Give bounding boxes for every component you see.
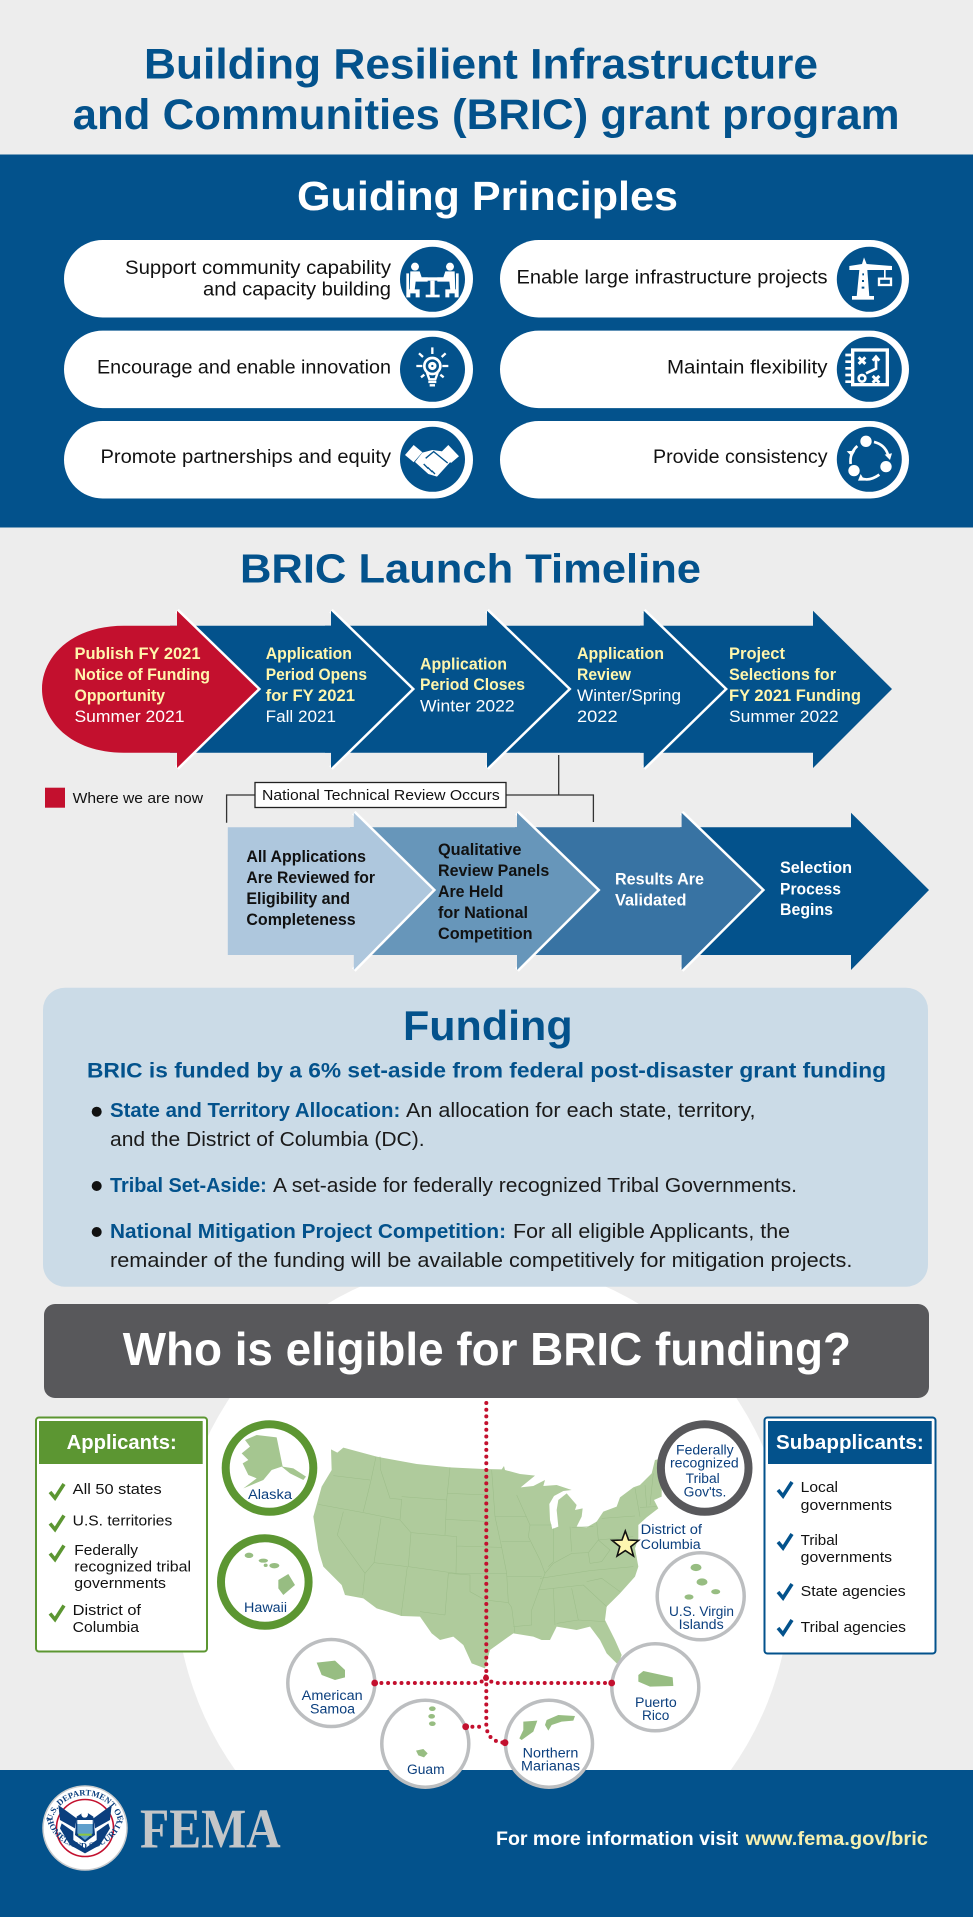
arrow: qualitative review panels: for National	[438, 904, 528, 922]
arrow: application period closes: Winter 2022	[420, 698, 515, 716]
arrow: results are validated: Results Are	[615, 871, 704, 889]
circle: Northern Marianas: Northern	[523, 1745, 578, 1760]
footer: more information link: www.fema.gov/bric	[745, 1829, 928, 1850]
arrow: qualitative review panels: Are Held	[438, 883, 503, 901]
icon: cycle arrows	[847, 436, 892, 481]
legend: where we are now	[45, 788, 203, 808]
circle: Puerto Rico: Rico	[642, 1708, 669, 1723]
bullet: national mitigation project competition: For all eligible Applicants, the	[513, 1220, 790, 1243]
bullet: national mitigation project competition	[92, 1220, 852, 1272]
circle: U.S. Virgin Islands: Islands	[679, 1617, 724, 1632]
circle: Puerto Rico	[612, 1644, 699, 1731]
arrow: publish notice (current stage): Summer 2021	[74, 708, 184, 726]
route: dotted lines to territories	[375, 1403, 612, 1743]
panel: subapplicants	[764, 1418, 936, 1654]
arrow: qualitative review panels: Qualitative	[438, 841, 521, 859]
arrow: selection process begins: Begins	[780, 901, 833, 919]
principle: consistency	[500, 421, 909, 498]
bullet: state and territory allocation: An allocation for each state, territory,	[406, 1099, 756, 1122]
checklist: subapplicants: State agencies	[801, 1584, 906, 1600]
circle: federally recognized Tribal governments: recognized	[670, 1456, 739, 1471]
title: Building Resilient Infrastructure	[144, 40, 818, 88]
arrow: application period opens: for FY 2021	[266, 687, 355, 705]
checklist: applicants: All 50 states	[73, 1482, 162, 1498]
connector: national technical review	[227, 755, 593, 823]
checklist: applicants: District of	[73, 1603, 142, 1619]
logo: FEMA wordmark: FEMA	[140, 1799, 281, 1861]
circle: U.S. Virgin Islands	[657, 1553, 744, 1640]
circle: American Samoa: American	[302, 1688, 363, 1703]
bullet: national mitigation project competition: remainder of the funding will be available competitively for mitigation projects.	[110, 1249, 852, 1272]
checklist: subapplicants: Tribal	[801, 1533, 838, 1549]
circle: federally recognized Tribal governments: Tribal	[686, 1471, 720, 1486]
arrow: qualitative review panels	[350, 813, 597, 970]
arrow: all applications reviewed: All Applications	[246, 848, 366, 866]
principle: partnerships: Promote partnerships and equity	[100, 447, 392, 468]
principle: flexibility	[500, 331, 909, 408]
arrow: application review: Application	[577, 645, 664, 663]
principle: large infrastructure: Enable large infrastructure projects	[516, 268, 828, 288]
arrow: qualitative review panels: Review Panels	[438, 862, 549, 880]
arrow: selection process begins: Selection	[780, 859, 852, 877]
arrow: application review	[480, 611, 724, 768]
logo: DHS seal: U.S. DEPARTMENT OF	[46, 1790, 124, 1820]
bullet: tribal set-aside: Tribal Set-Aside:	[110, 1174, 267, 1197]
circle: American Samoa	[288, 1640, 375, 1726]
arrow: project selections: Project	[729, 645, 786, 663]
marker: District of Columbia star: Columbia	[641, 1537, 701, 1552]
principle: community capability: Support community capability	[125, 258, 392, 279]
bullet: state and territory allocation	[92, 1099, 755, 1151]
arrow: application review: 2022	[577, 708, 618, 726]
checklist: subapplicants: Local	[801, 1480, 838, 1496]
bullet: tribal set-aside: A set-aside for federally recognized Tribal Governments.	[273, 1174, 797, 1197]
title	[73, 40, 900, 139]
circle: federally recognized Tribal governments: Federally	[676, 1442, 734, 1457]
checklist: subapplicants: governments	[801, 1550, 892, 1566]
arrow: project selections: FY 2021 Funding	[729, 687, 861, 705]
banner: who is eligible: Who is eligible for BRIC funding?	[123, 1323, 851, 1375]
icon: crane	[849, 257, 892, 300]
circle: Hawaii: Hawaii	[244, 1600, 287, 1615]
checklist: subapplicants: governments	[801, 1498, 892, 1514]
banner: who is eligible	[44, 1304, 929, 1398]
arrow: all applications reviewed: Are Reviewed for	[246, 869, 376, 887]
arrow: application period opens	[170, 611, 412, 768]
icon: people at table	[406, 263, 459, 297]
title: and Communities (BRIC) grant program	[73, 91, 900, 139]
arrow: application period opens: Application	[266, 645, 352, 663]
arrow: publish notice (current stage): Notice of Funding	[74, 666, 210, 684]
circle: U.S. Virgin Islands: U.S. Virgin	[669, 1604, 734, 1619]
arrow: application period closes: Application	[420, 656, 507, 674]
connector: national technical review: National Technical Review Occurs	[262, 787, 500, 804]
panel: subapplicants: Subapplicants:	[776, 1432, 924, 1454]
panel: guiding principles	[0, 154, 973, 528]
arrow: application period opens: Period Opens	[266, 666, 367, 684]
panel: applicants	[36, 1418, 207, 1652]
checklist: subapplicants	[778, 1480, 906, 1636]
principle: innovation	[64, 331, 473, 408]
circle: Alaska: Alaska	[248, 1487, 293, 1502]
footer: more information link	[496, 1829, 928, 1850]
arrow: application period opens: Fall 2021	[266, 708, 336, 726]
principle: large infrastructure	[500, 240, 909, 318]
principle: flexibility: Maintain flexibility	[667, 358, 828, 379]
checklist: applicants: governments	[74, 1576, 166, 1592]
principle: consistency: Provide consistency	[653, 447, 828, 468]
arrow: publish notice (current stage)	[42, 611, 258, 768]
circle: federally recognized Tribal governments	[661, 1424, 748, 1512]
checklist: applicants: Federally	[74, 1543, 139, 1559]
circle: Guam: Guam	[407, 1762, 445, 1777]
logo: DHS seal	[42, 1785, 128, 1871]
checklist: subapplicants: Tribal agencies	[801, 1620, 906, 1636]
footer: more information link: For more information visit	[496, 1829, 739, 1850]
icon: light bulb	[416, 347, 448, 385]
arrow: publish notice (current stage): Opportunity	[74, 687, 166, 705]
circle: Northern Marianas	[506, 1700, 592, 1787]
principle: innovation: Encourage and enable innovation	[97, 358, 391, 379]
arrow: application review: Winter/Spring	[577, 687, 681, 705]
arrow: application period closes	[325, 611, 568, 768]
marker: District of Columbia star: District of	[641, 1522, 702, 1537]
bullet: state and territory allocation: and the District of Columbia (DC).	[110, 1128, 425, 1151]
arrow: results are validated	[515, 813, 762, 970]
principle: partnerships	[64, 421, 473, 498]
circle: Hawaii	[221, 1538, 309, 1626]
route end markers	[371, 1675, 615, 1746]
timeline row two	[228, 813, 929, 970]
arrow: all applications reviewed	[228, 813, 433, 970]
logo: DHS seal: HOMELAND SECURITY	[46, 1817, 123, 1848]
checklist: applicants: U.S. territories	[73, 1513, 172, 1529]
timeline row one	[42, 611, 892, 768]
footer band	[0, 1770, 973, 1917]
circle: federally recognized Tribal governments: Gov'ts.	[684, 1485, 726, 1500]
arrow: all applications reviewed: Eligibility and	[246, 890, 350, 908]
principle: community capability: and capacity building	[203, 280, 391, 300]
circle: Puerto Rico: Puerto	[635, 1695, 677, 1710]
heading: timeline: BRIC Launch Timeline	[240, 546, 701, 592]
circle: Northern Marianas: Marianas	[521, 1759, 580, 1774]
arrow: application review: Review	[577, 666, 631, 684]
subheading: funding source: BRIC is funded by a 6% set-aside from federal post-disaster grant funding	[87, 1059, 886, 1083]
map: contiguous United States	[313, 1448, 662, 1668]
heading: funding: Funding	[403, 1002, 573, 1049]
checklist: applicants	[50, 1482, 191, 1636]
arrow: application period closes: Period Closes	[420, 676, 525, 694]
arrow: publish notice (current stage): Publish FY 2021	[74, 645, 200, 663]
arrow: project selections: Summer 2022	[729, 708, 839, 726]
principle: community capability	[64, 240, 473, 318]
arrow: results are validated: Validated	[615, 892, 686, 910]
bullet: national mitigation project competition: National Mitigation Project Competition:	[110, 1220, 506, 1243]
marker: District of Columbia star	[612, 1522, 702, 1556]
icon: playbook	[845, 350, 887, 385]
circle: Guam	[382, 1700, 469, 1787]
circle: American Samoa: Samoa	[310, 1701, 356, 1716]
heading: guiding principles: Guiding Principles	[297, 173, 678, 219]
arrow: selection process begins: Process	[780, 880, 841, 898]
bullet: state and territory allocation: State and Territory Allocation:	[110, 1099, 400, 1122]
checklist: applicants: Columbia	[73, 1620, 140, 1636]
circle: Alaska	[226, 1424, 313, 1512]
arrow: qualitative review panels: Competition	[438, 925, 533, 943]
icon: handshake	[405, 445, 459, 477]
checklist: applicants: recognized tribal	[74, 1560, 191, 1576]
arrow: all applications reviewed: Completeness	[246, 911, 356, 929]
legend: where we are now: Where we are now	[73, 790, 203, 807]
arrow: project selections	[640, 611, 892, 768]
arrow: selection process begins	[680, 813, 929, 970]
panel: funding	[43, 988, 928, 1287]
arrow: project selections: Selections for	[729, 666, 837, 684]
panel: applicants: Applicants:	[67, 1432, 177, 1454]
